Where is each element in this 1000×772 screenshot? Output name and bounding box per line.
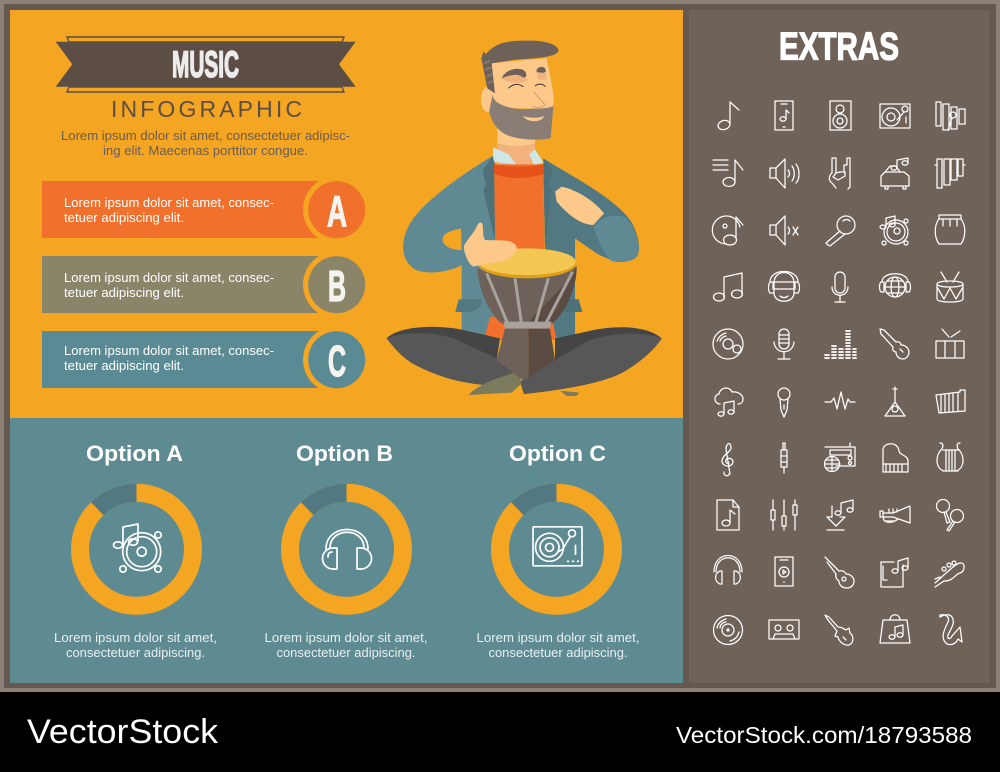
- icon: microphone: [832, 272, 848, 302]
- panel: orange header: [10, 10, 683, 418]
- icon: vinyl record: [714, 616, 742, 644]
- icon: turntable: [533, 527, 582, 566]
- column: option B: [264, 441, 428, 660]
- icon: violin: [880, 329, 909, 359]
- icon: vinyl: [713, 329, 743, 359]
- footer bar: VectorStock.com/18793588: [676, 722, 972, 748]
- icon: electric guitar: [825, 615, 853, 645]
- hands: [555, 187, 604, 225]
- caption: consectetuer adipiscing.: [276, 646, 416, 660]
- icon: sound wave: [825, 392, 855, 409]
- footer bar: [0, 692, 1000, 772]
- icon: audio jack: [781, 443, 787, 473]
- icon: headphones: [714, 556, 742, 584]
- option bar C: [42, 326, 370, 393]
- icon: guitar headstock: [935, 561, 964, 587]
- extras heading: EXTRAS: [779, 26, 899, 68]
- icon: drum with sticks: [936, 329, 964, 358]
- subtitle: INFOGRAPHIC: [111, 96, 302, 122]
- icon: speaker: [830, 101, 851, 130]
- icon: download music: [827, 500, 853, 530]
- intro text: ing elit. Maecenas porttitor congue.: [103, 144, 308, 158]
- icon: conga drum: [935, 215, 965, 244]
- caption: consectetuer adipiscing.: [488, 646, 628, 660]
- icon: rock hand: [829, 158, 850, 189]
- column: option C: Option C: [509, 441, 606, 466]
- caption: Lorem ipsum dolor sit amet,: [264, 631, 428, 645]
- icon: acoustic guitar: [825, 557, 854, 588]
- intro text: [61, 129, 350, 158]
- option bar B: tetuer adipiscing elit.: [64, 286, 184, 300]
- icon: snare drum: [937, 272, 963, 302]
- caption: [54, 631, 217, 660]
- icon: balalaika: [885, 387, 905, 416]
- icon: car with notes: [881, 158, 909, 189]
- column: option A: Option A: [86, 441, 183, 466]
- icon: headphones: [322, 530, 372, 569]
- icon: album with notes: [881, 558, 908, 587]
- column: option A: [54, 441, 217, 660]
- icon: shopping bag with notes: [880, 615, 910, 643]
- option bar A: tetuer adipiscing elit.: [64, 211, 184, 225]
- icon: speaker with notes: [880, 216, 908, 245]
- icon: speaker with notes: [114, 524, 161, 572]
- icon: sliders: [771, 500, 797, 530]
- option bar C: Lorem ipsum dolor sit amet, consec-: [64, 344, 274, 358]
- column: option C: [476, 441, 640, 660]
- icon: phone play: [775, 557, 793, 586]
- panel: extras: [689, 10, 990, 683]
- icon: xylophone: [935, 159, 965, 188]
- title ribbon: [56, 37, 356, 92]
- icon: double note: [714, 273, 742, 301]
- option bar A: A: [327, 187, 347, 236]
- caption: [476, 631, 640, 660]
- icon: xylophone with mallet: [936, 102, 965, 130]
- icon: turntable: [880, 104, 910, 128]
- icon: equalizer bars: [825, 331, 856, 358]
- icon: note with list: [713, 160, 743, 186]
- caption: [264, 631, 428, 660]
- icon: cloud with notes: [715, 388, 743, 416]
- icon: treble clef: [722, 444, 733, 476]
- illustration: man playing djembe: [387, 41, 662, 396]
- panel: teal options: [10, 418, 683, 683]
- icon: speaker volume: [770, 159, 799, 188]
- icon: karaoke mic: [826, 216, 855, 246]
- icon: lyre: [937, 443, 963, 471]
- option bar B: B: [328, 262, 346, 311]
- option bar C: tetuer adipiscing elit.: [64, 359, 184, 373]
- icon: maracas: [936, 500, 964, 531]
- icon: phone with note: [775, 101, 793, 130]
- djembe drum: [477, 248, 577, 381]
- icon: accordion: [936, 390, 965, 413]
- caption: Lorem ipsum dolor sit amet,: [476, 631, 640, 645]
- icon: music file: [717, 500, 739, 530]
- option bar A: [42, 176, 370, 243]
- icon: grand piano: [883, 444, 908, 472]
- option bar B: Lorem ipsum dolor sit amet, consec-: [64, 271, 274, 285]
- head: [481, 41, 559, 140]
- option bar B: [42, 251, 370, 318]
- icon: dj head with headphones: [768, 272, 800, 301]
- icon: cassette: [769, 620, 799, 639]
- icon: cd with note: [712, 216, 743, 245]
- icon: trumpet: [880, 506, 910, 523]
- icon: radio with globe: [824, 443, 855, 472]
- intro text: Lorem ipsum dolor sit amet, consectetuer adipisc-: [61, 129, 350, 143]
- icon: saxophone: [940, 615, 962, 645]
- icon: studio mic: [774, 329, 794, 359]
- legs: [387, 327, 662, 396]
- title ribbon: MUSIC: [172, 44, 239, 85]
- icon: globe headphones: [880, 274, 910, 297]
- icon grid: [712, 101, 965, 645]
- footer bar: VectorStock: [27, 713, 219, 751]
- icon: music note: [717, 102, 739, 131]
- icon: handheld mic: [778, 388, 790, 417]
- option bar C: C: [328, 337, 346, 386]
- icon: speaker mute: [770, 216, 798, 245]
- caption: consectetuer adipiscing.: [66, 646, 205, 660]
- option bar A: Lorem ipsum dolor sit amet, consec-: [64, 196, 274, 210]
- column: option B: Option B: [296, 441, 393, 466]
- caption: Lorem ipsum dolor sit amet,: [54, 631, 217, 645]
